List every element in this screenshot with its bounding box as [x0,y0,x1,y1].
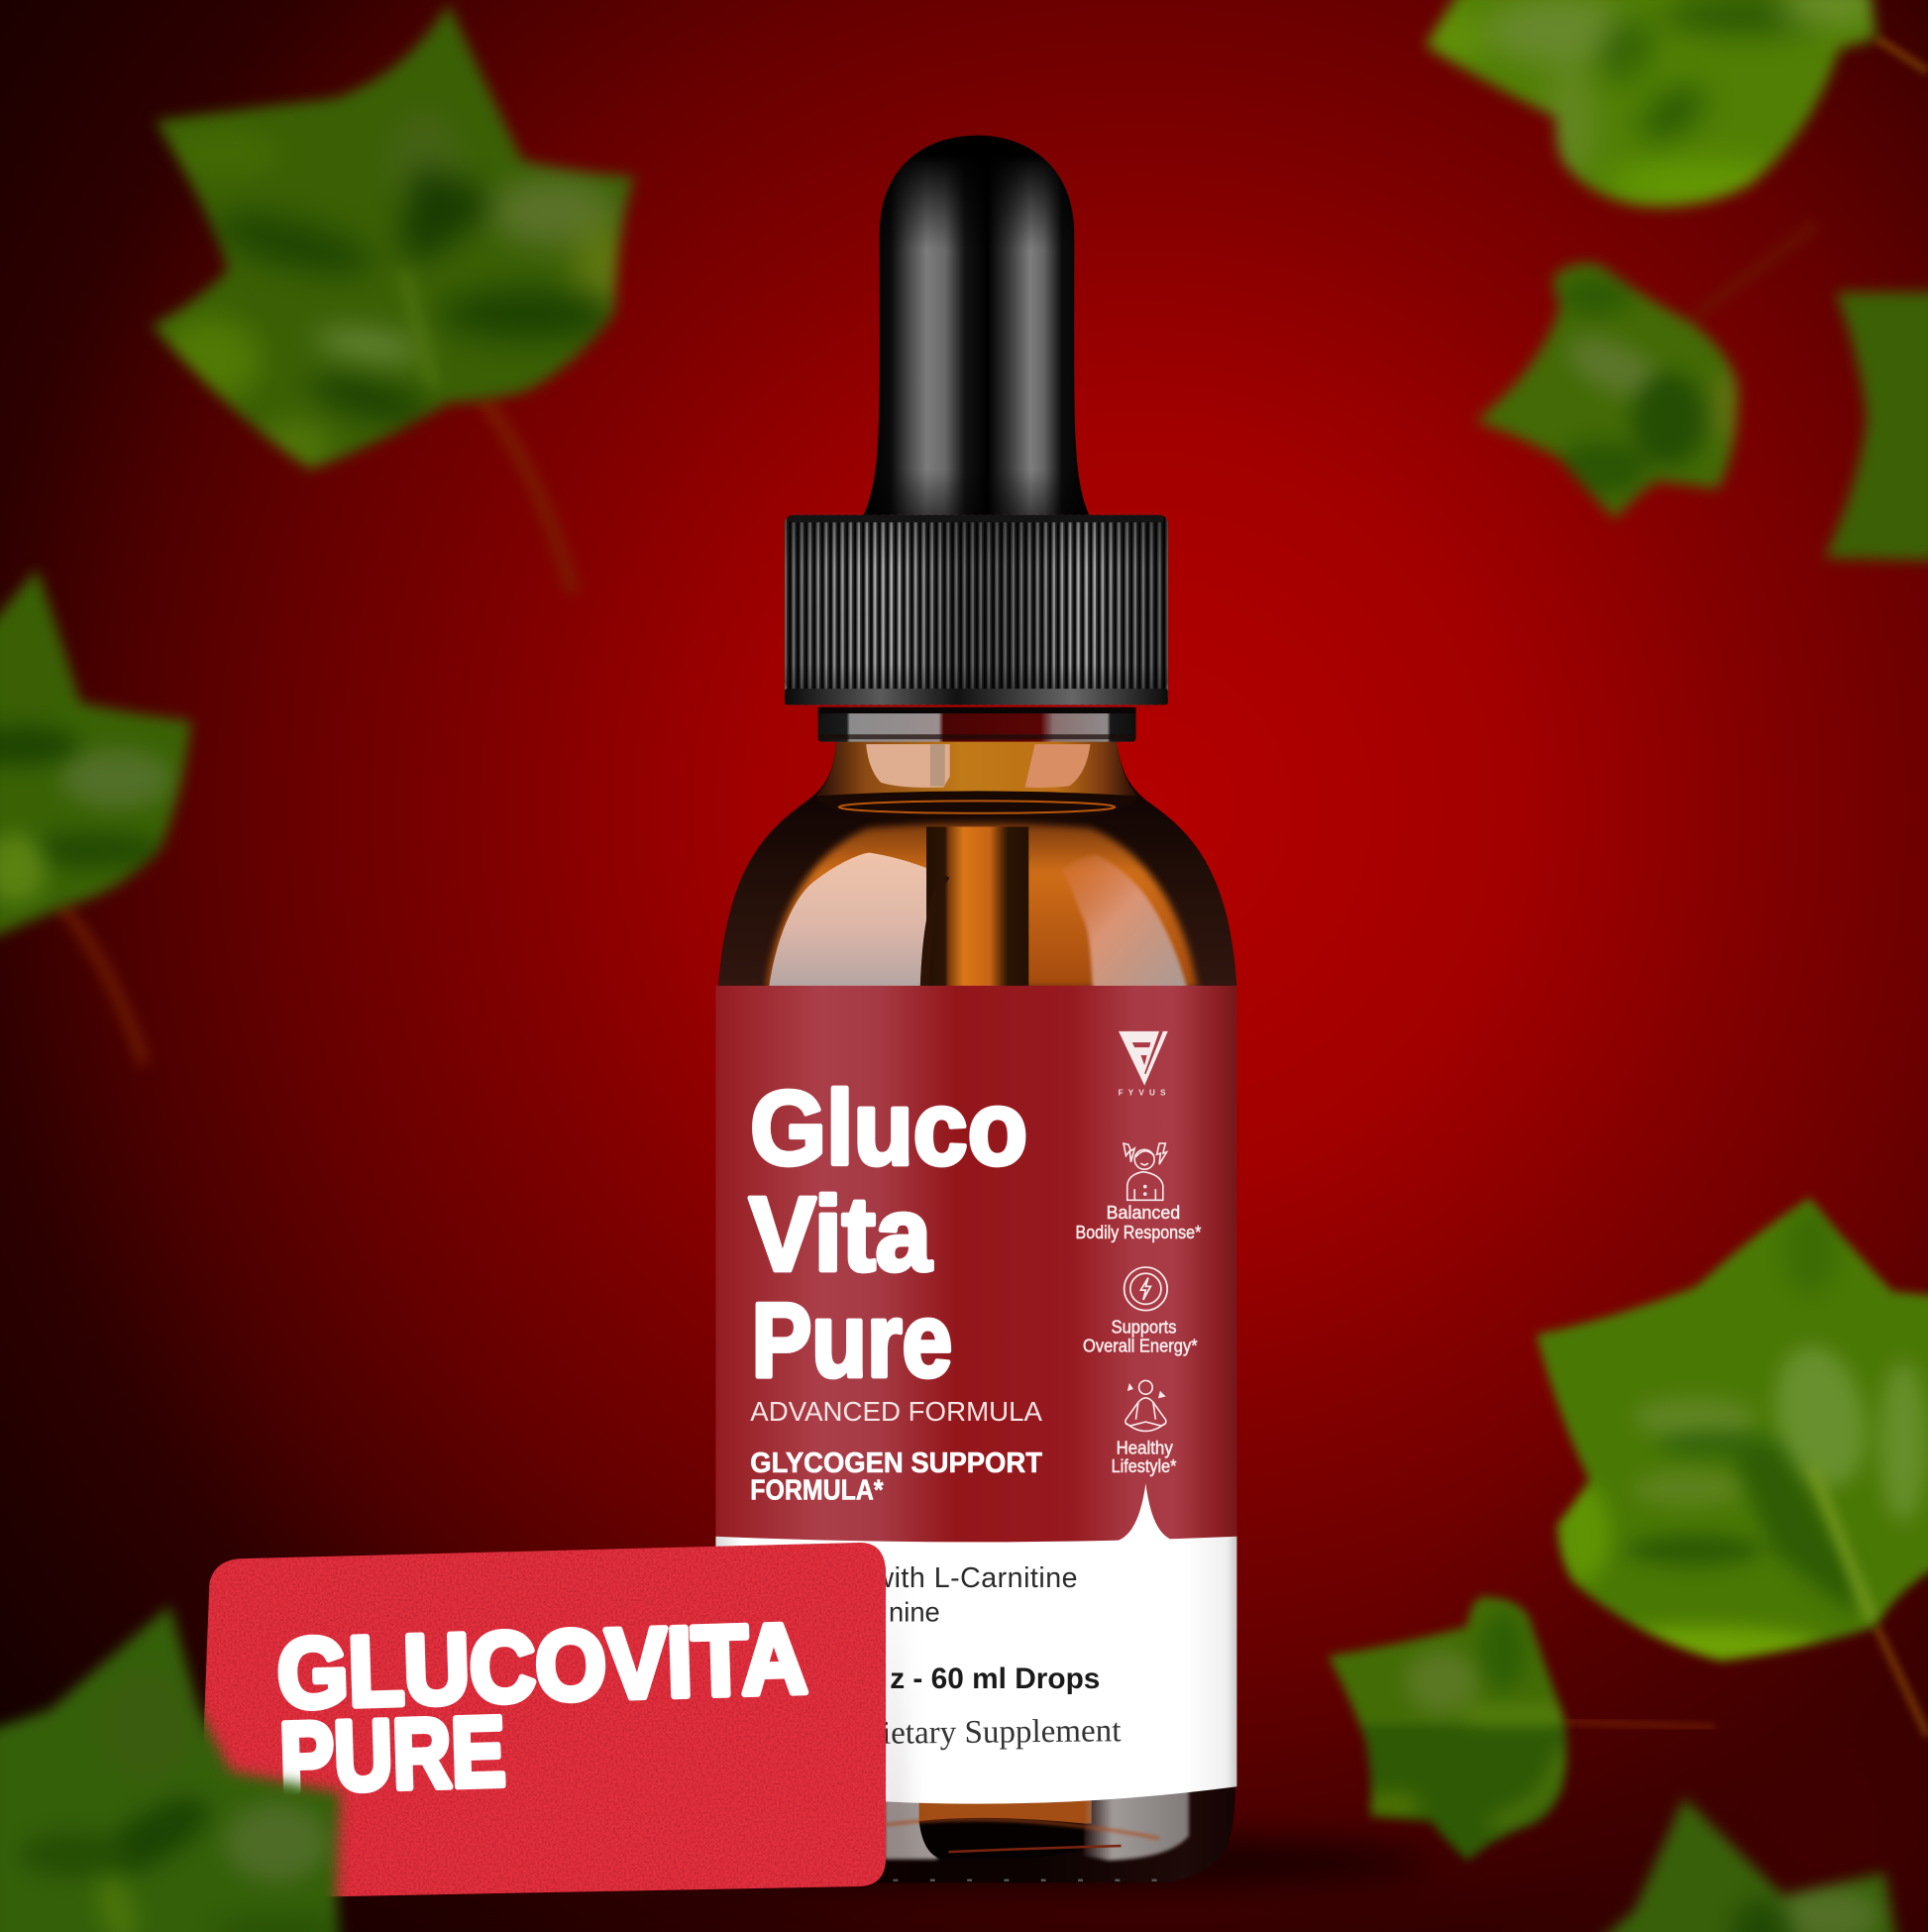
label: red panel [715,986,1236,1543]
icon: person with bolts [1124,1143,1167,1200]
leaf: right edge [1825,292,1928,561]
product: dropper bottle [715,136,1236,1882]
product name: Gluco [750,1070,1027,1187]
claim: GLYCOGEN SUPPORT [750,1448,1042,1479]
icon text: healthy lifestyle [1112,1437,1176,1476]
bottle base [718,1774,1235,1882]
card title: GLUCOVITA [275,1604,808,1730]
claim: FORMULA* [750,1474,884,1506]
red card: GlucoVita Pure [198,1543,886,1898]
dropper bulb [864,136,1089,515]
ingredients text: Formula with L-Carnitine [758,1562,1078,1594]
supplement text: Dietary Supplement [858,1713,1122,1752]
logo: FYVUS: FYVUS [1119,1089,1171,1098]
icon text: balanced bodily response: Balanced [1107,1202,1180,1223]
card shadow [370,1555,900,1903]
icon: meditating figure [1125,1380,1166,1431]
leaf: upper right with stem [1466,224,1816,530]
leaf: top right with stem [1405,0,1928,222]
leaf: lower right with stem [1318,1589,1715,1867]
ribbed cap [785,515,1168,704]
icon text: healthy lifestyle: Lifestyle* [1112,1455,1176,1476]
logo: FYVUS [1119,1031,1171,1098]
product name: Pure [752,1282,952,1399]
leaf: top left with stem [136,0,653,588]
collar [818,707,1135,742]
leaf: large right with stem [1515,1183,1928,1736]
subtitle: ADVANCED FORMULA [750,1396,1042,1427]
product name [749,1070,1027,1399]
icon text: balanced bodily response: Bodily Response* [1076,1222,1201,1242]
icon text: supports overall energy: Overall Energy* [1083,1335,1198,1355]
card title: PURE [278,1697,507,1813]
icon text: healthy lifestyle: Healthy [1117,1437,1173,1457]
claim [750,1448,1042,1506]
icon text: balanced bodily response [1076,1202,1201,1242]
glass neck and shoulder [718,739,1236,990]
icon: energy circle [1125,1267,1167,1311]
card title [275,1604,808,1813]
icon text: supports overall energy: Supports [1112,1317,1176,1338]
icon text: supports overall energy [1083,1317,1198,1355]
leaf: mid left with stem [0,561,203,1060]
volume text: 2 fl oz - 60 ml Drops [821,1663,1100,1695]
ingredients text line 2: L-Arginine [816,1597,940,1628]
label: white panel [715,1483,1236,1804]
product name: Vita [749,1176,932,1293]
leaf: bottom right [1589,1786,1909,1932]
floor shadow [665,1836,1429,1890]
leaf: bottom left foreground [0,1595,358,1932]
